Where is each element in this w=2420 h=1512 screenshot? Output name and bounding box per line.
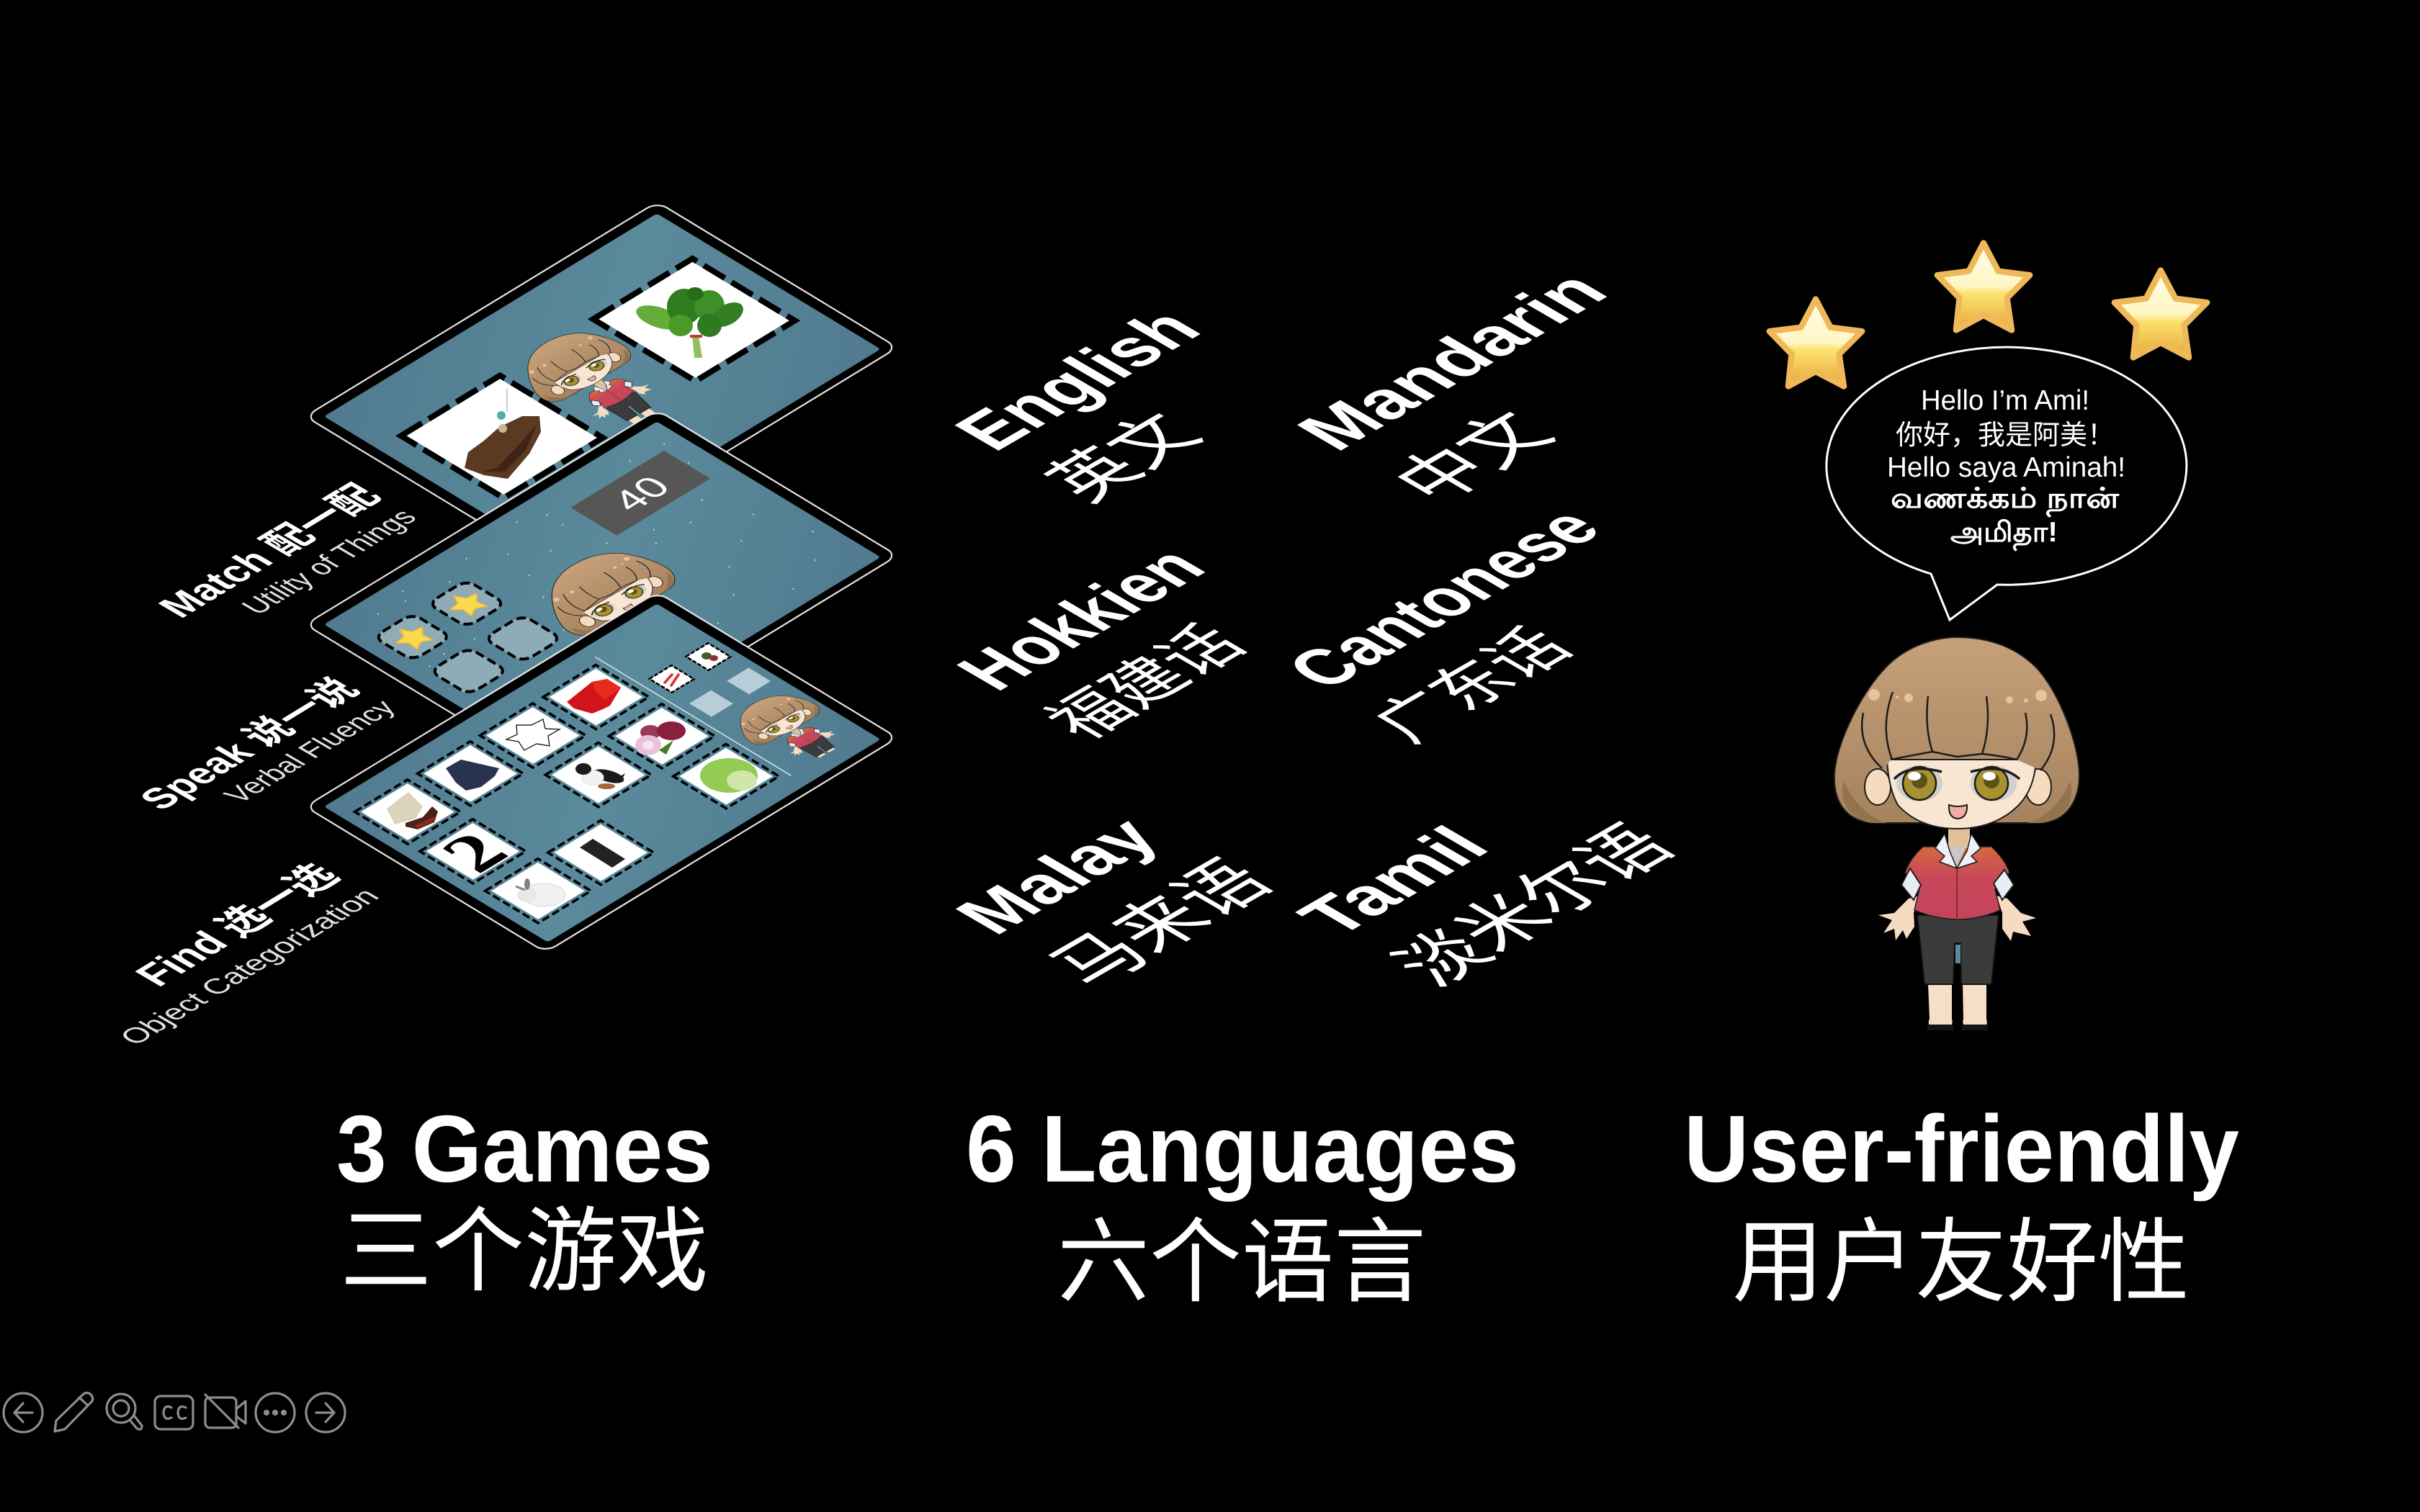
answer slots — [649, 643, 771, 717]
column title: 6 Languages: 6 Languages — [966, 1096, 1519, 1202]
character: Ami head — [521, 535, 686, 642]
column title: User-friendly: 用户友好性 — [1732, 1211, 2190, 1313]
icon: red chilies — [665, 675, 678, 685]
icon: small vegetable — [702, 652, 718, 661]
icon: video off — [205, 1395, 246, 1428]
language: Mandarin: Mandarin — [1279, 261, 1624, 461]
icon: star 1 — [1770, 300, 1862, 386]
icon: brown boat — [465, 389, 541, 479]
language: Mandarin: 中文 — [1376, 401, 1571, 514]
language: English: English — [937, 298, 1218, 461]
icon: remote control — [580, 839, 625, 868]
panel: languages — [937, 261, 1691, 999]
stars rating — [1770, 243, 2207, 386]
greeting text: Hello I’m Ami! — [1921, 385, 2089, 416]
column title: 3 Games: 3 Games — [336, 1096, 713, 1202]
presentation controls — [4, 1392, 345, 1432]
picture cards — [354, 665, 780, 923]
tablet: Match game — [305, 202, 897, 562]
greeting text: வணக்கம் நான் — [1891, 483, 2120, 518]
label: Match: Match 配一配 — [148, 478, 390, 624]
language: English: 英文 — [1029, 402, 1218, 512]
label: Speak: Speak 说一说 — [130, 672, 368, 816]
icon: more options — [256, 1393, 295, 1432]
star tiles — [373, 580, 563, 695]
icon: star 3 — [2115, 271, 2207, 357]
column title: User-friendly: User-friendly — [1684, 1096, 2239, 1202]
language: Cantonese: 广东话 — [1357, 618, 1587, 752]
icon: closed captions — [155, 1396, 193, 1429]
numeral card glyph: 2 — [424, 822, 525, 883]
timer: 40: 40 — [603, 470, 681, 518]
language: Malay — [938, 806, 1289, 999]
greeting text — [1887, 385, 2125, 552]
label: Find: Find 选一选 — [125, 858, 349, 993]
icon: red sofa — [567, 679, 621, 714]
speech bubble — [1827, 347, 2187, 620]
language: Cantonese: Cantonese — [1269, 498, 1618, 699]
label: Speak: Verbal Fluency — [218, 696, 403, 808]
icon: magnifier — [107, 1394, 142, 1429]
icon: plaid skirt — [446, 760, 499, 791]
language: Hokkien: Hokkien — [939, 536, 1222, 701]
column title: 3 Games — [336, 1096, 713, 1303]
language: Malay: Malay — [938, 806, 1176, 945]
label: Match: Utility of Things — [234, 504, 424, 619]
tablet: Find game — [305, 592, 897, 953]
character: Ami small — [740, 696, 835, 757]
icon: six-point star — [506, 719, 560, 750]
timer: 40 — [570, 451, 710, 536]
column title: 3 Games: 三个游戏 — [340, 1200, 709, 1303]
greeting text: 你好，我是阿美！ — [1896, 420, 2115, 451]
icon: spinach bunch — [633, 287, 748, 358]
icon: lettuce — [700, 758, 758, 793]
language: Malay: 马来语 — [1031, 849, 1289, 999]
icon: previous arrow — [4, 1393, 42, 1432]
icon: star 2 — [1937, 243, 2030, 330]
language: Hokkien — [939, 536, 1261, 749]
panel: game tablets — [305, 202, 897, 953]
column title: 6 Languages: 六个语言 — [1057, 1211, 1426, 1314]
greeting text: Hello saya Aminah! — [1887, 452, 2125, 483]
language: Hokkien: 福建话 — [1031, 616, 1261, 749]
tablet: Speak game — [305, 410, 897, 770]
icon: dog — [575, 763, 625, 789]
column title: User-friendly — [1684, 1096, 2239, 1313]
character: Ami small — [502, 318, 694, 449]
greeting text: அமிதா! — [1950, 517, 2058, 552]
icon: white rabbit — [516, 878, 565, 906]
icon: next arrow — [306, 1393, 345, 1432]
language: Tamil: 淡米尔语 — [1376, 814, 1691, 997]
icon: red onion — [635, 721, 686, 755]
character: Ami — [1834, 637, 2079, 1030]
language: Tamil: Tamil — [1281, 816, 1506, 946]
icon: pencil — [55, 1392, 93, 1431]
icon: sailing ship — [387, 792, 438, 829]
column title: 6 Languages — [966, 1096, 1519, 1314]
label: Find: Object Categorization — [113, 884, 386, 1050]
